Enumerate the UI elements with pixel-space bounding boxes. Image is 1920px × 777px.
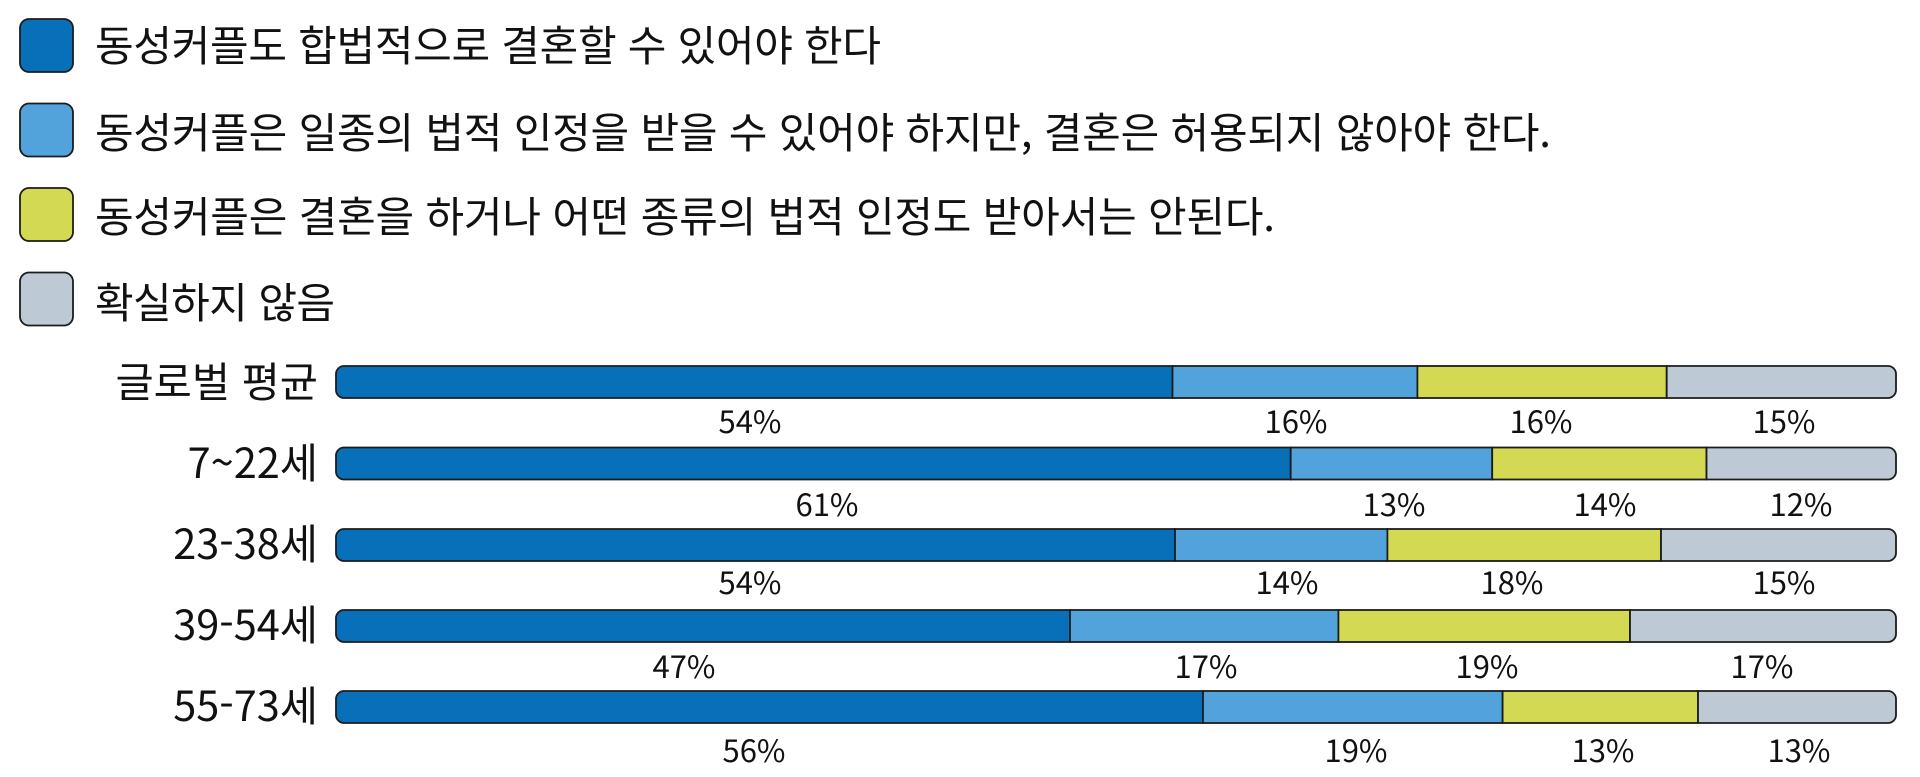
values: 19%: [1325, 726, 1387, 771]
values: 16%: [1265, 397, 1327, 442]
values: 54%: [719, 397, 781, 442]
values: 61%: [796, 480, 858, 525]
values: 19%: [1456, 642, 1518, 687]
stacked bar: [336, 691, 1896, 723]
values: 12%: [1770, 480, 1832, 525]
values: 47%: [653, 642, 715, 687]
legend label: 동성커플은 결혼을 하거나 어떤 종류의 법적 인정도 받아서는 안된다.: [95, 184, 1275, 245]
stacked bar: [336, 448, 1896, 480]
values: 16%: [1510, 397, 1572, 442]
swatch: dark blue: [20, 19, 73, 72]
legend item: legal recognition only: [20, 100, 1551, 161]
legend item: legal marriage: [20, 13, 881, 74]
legend label: 확실하지 않음: [95, 270, 335, 331]
values: 14%: [1256, 558, 1318, 603]
values: 15%: [1753, 558, 1815, 603]
swatch: light blue: [20, 104, 73, 156]
swatch: grey: [20, 272, 73, 326]
values: [723, 726, 1830, 771]
row label: 7~22세: [188, 430, 318, 490]
values: 13%: [1768, 726, 1830, 771]
row label: 글로벌 평균: [115, 349, 318, 409]
legend label: 동성커플은 일종의 법적 인정을 받을 수 있어야 하지만, 결혼은 허용되지 않아야 한다.: [95, 100, 1551, 161]
values: 17%: [1175, 642, 1237, 687]
legend: [20, 13, 1551, 331]
row: ages 39-54: [173, 592, 1896, 687]
values: [719, 558, 1815, 603]
swatch: yellow: [20, 188, 73, 241]
stacked bar chart: [115, 349, 1896, 771]
values: [796, 480, 1832, 525]
values: 18%: [1481, 558, 1543, 603]
row label: 39-54세: [173, 592, 318, 652]
stacked bar: [336, 610, 1896, 642]
values: 13%: [1572, 726, 1634, 771]
stacked bar: [336, 529, 1896, 561]
values: 14%: [1574, 480, 1636, 525]
row: ages 55-73: [173, 673, 1896, 771]
row: global average: [115, 349, 1896, 442]
stacked bar: [336, 366, 1896, 398]
legend item: no recognition: [20, 184, 1275, 245]
values: 56%: [723, 726, 785, 771]
values: 17%: [1731, 642, 1793, 687]
values: [653, 642, 1793, 687]
values: 54%: [719, 558, 781, 603]
values: [719, 397, 1815, 442]
legend label: 동성커플도 합법적으로 결혼할 수 있어야 한다: [95, 13, 881, 74]
values: 13%: [1363, 480, 1425, 525]
legend item: not sure: [20, 270, 335, 331]
row: ages 23-38: [173, 511, 1896, 603]
values: 15%: [1753, 397, 1815, 442]
row: ages 7-22: [188, 430, 1896, 525]
row label: 55-73세: [173, 673, 318, 733]
row label: 23-38세: [173, 511, 318, 571]
